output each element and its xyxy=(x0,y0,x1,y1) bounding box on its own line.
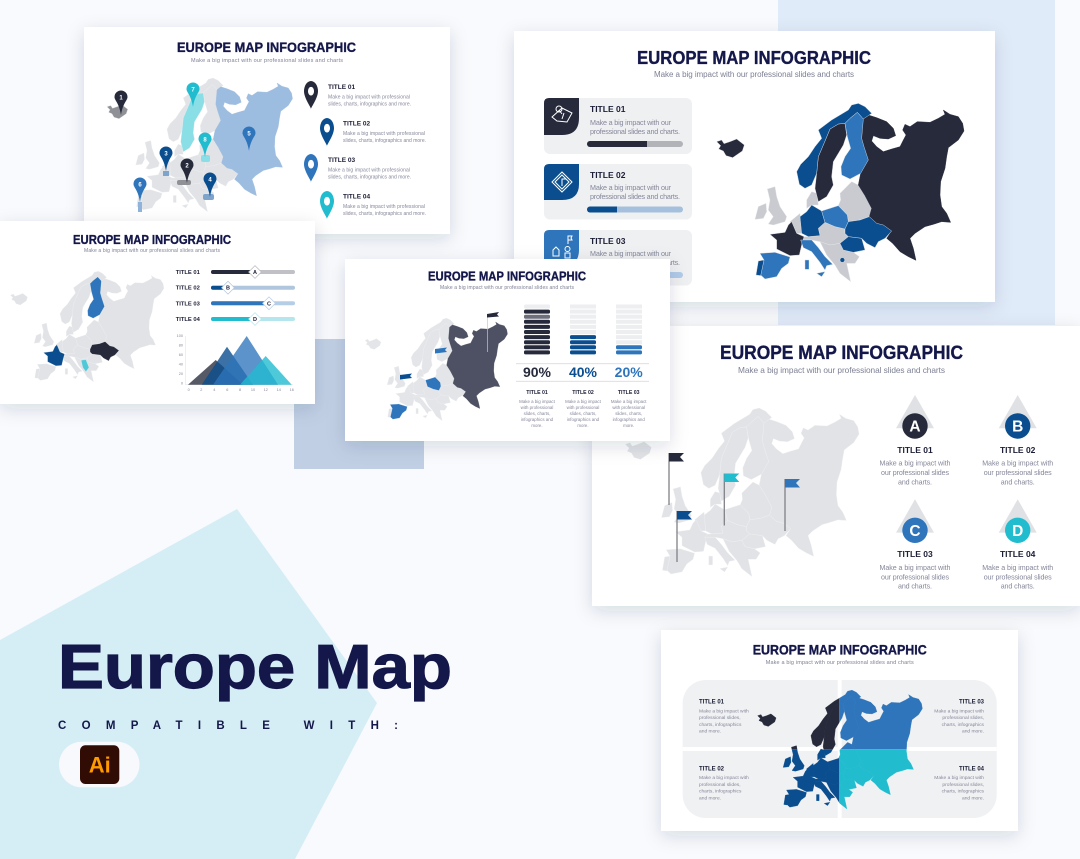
card 02: TITLE 02 xyxy=(590,170,626,180)
legend items: TITLE 04 xyxy=(343,194,370,200)
legend items: slides, charts, infographics and more. xyxy=(343,211,426,217)
panel 1 subheading: Make a big impact with our professional slides and charts xyxy=(191,58,343,64)
map pins 1 to 8: 1 xyxy=(119,96,123,102)
map pins 1 to 8: 4 xyxy=(208,178,212,184)
panel: pins slide xyxy=(84,27,450,234)
column 40% xyxy=(565,304,602,428)
slider rows: C xyxy=(267,301,271,307)
badge B: B xyxy=(1012,418,1023,436)
panel: stacked percent bars slide xyxy=(345,259,670,441)
mountain chart: 2 xyxy=(200,388,202,392)
badge A: A xyxy=(909,418,921,436)
panel 4 map xyxy=(365,318,508,421)
quadrant text 02: charts, infographics xyxy=(699,788,742,794)
main title: Europe Map xyxy=(58,633,452,702)
slider rows: TITLE 04 xyxy=(176,317,201,323)
badge: illustrator xyxy=(59,742,140,787)
badge: illustrator: Ai xyxy=(89,752,111,778)
mountain chart xyxy=(177,334,294,392)
quadrant text 02 xyxy=(699,766,749,802)
mountain chart: 0 xyxy=(181,382,183,386)
map pins 1 to 8: 5 xyxy=(247,132,251,138)
column 40%: TITLE 02 xyxy=(572,390,594,396)
map flags xyxy=(400,312,499,380)
map pins 1 to 8: 2 xyxy=(185,164,189,170)
column 40%: infographics and xyxy=(567,417,600,422)
card 01: Make a big impact with our xyxy=(590,118,672,127)
slider rows: TITLE 02 xyxy=(176,286,200,292)
panel 6 heading: EUROPE MAP INFOGRAPHIC xyxy=(753,642,927,658)
mountain chart: 10 xyxy=(251,388,255,392)
column 20% xyxy=(611,304,647,428)
column 90%: slides, charts, xyxy=(524,411,550,416)
badge C: Make a big impact with xyxy=(880,564,951,572)
slider rows: D xyxy=(253,317,257,323)
panel 6 subheading: Make a big impact with our professional slides and charts xyxy=(766,660,914,666)
legend items: slides, charts, infographics and more. xyxy=(328,102,411,108)
column 40%: with professional xyxy=(567,405,599,410)
badge B: our professional slides xyxy=(984,469,1052,477)
panel 5 map xyxy=(625,408,859,577)
legend items: Make a big impact with professional xyxy=(343,131,425,137)
panel 3 map xyxy=(10,271,164,382)
legend items: Make a big impact with professional xyxy=(328,168,410,174)
badge C xyxy=(880,499,951,591)
highlighted small countries on panel 1 map xyxy=(138,155,214,212)
badge A: TITLE 01 xyxy=(897,445,933,455)
quadrant text 04: Make a big impact with xyxy=(934,775,984,781)
map pins 1 to 8: 7 xyxy=(191,88,195,94)
map pins 1 to 8: 6 xyxy=(138,182,142,188)
column 90%: TITLE 01 xyxy=(526,390,548,396)
quadrant text 01 xyxy=(699,700,749,734)
slider rows: A xyxy=(253,270,257,276)
icon: folded map xyxy=(552,106,572,122)
slider rows xyxy=(176,266,295,325)
decorative blue square xyxy=(294,339,424,469)
card 02 xyxy=(544,164,692,220)
quadrant text 03 xyxy=(934,700,985,734)
legend items: TITLE 01 xyxy=(328,84,355,91)
column 20%: slides, charts, xyxy=(615,411,642,416)
mountain chart: 14 xyxy=(277,388,281,392)
badge D xyxy=(982,499,1053,591)
quadrant text 04: charts, infographics xyxy=(942,788,985,794)
panel 1 map xyxy=(107,78,292,212)
quadrant text 03: TITLE 03 xyxy=(959,700,985,706)
mountain chart: 100 xyxy=(177,334,183,338)
column 20%: infographics and xyxy=(613,417,645,422)
legend items: slides, charts, infographics and more. xyxy=(328,174,411,180)
badge B xyxy=(982,395,1053,486)
card 02: Make a big impact with our xyxy=(590,183,672,192)
map pins 1 to 8 xyxy=(114,82,256,202)
quadrant text 03: charts, infographics xyxy=(942,722,985,728)
legend items: TITLE 03 xyxy=(328,157,355,164)
badge C: and charts. xyxy=(898,583,932,591)
panel 5 heading: EUROPE MAP INFOGRAPHIC xyxy=(720,343,963,364)
panel: quadrant map slide xyxy=(661,630,1018,831)
column 90%: with professional xyxy=(521,405,553,410)
panel 3 subheading: Make a big impact with our professional slides and charts xyxy=(84,248,220,254)
mountain chart: 6 xyxy=(226,388,228,392)
slider rows: TITLE 01 xyxy=(176,270,201,276)
badge D: D xyxy=(1012,523,1023,540)
badge B: Make a big impact with xyxy=(982,460,1053,468)
quadrant background xyxy=(683,680,997,818)
badge D: and charts. xyxy=(1001,583,1035,591)
slider rows: TITLE 03 xyxy=(176,301,201,307)
column 90% xyxy=(519,304,556,428)
compatible with label: COMPATIBLE WITH: xyxy=(58,720,398,732)
badge D: TITLE 04 xyxy=(1000,549,1036,559)
card 03: TITLE 03 xyxy=(590,236,626,246)
badge D: Make a big impact with xyxy=(982,564,1053,572)
quadrant text 03: professional slides, xyxy=(942,715,984,721)
card 02: professional slides and charts. xyxy=(590,192,680,201)
panel 2 heading: EUROPE MAP INFOGRAPHIC xyxy=(637,47,871,68)
legend items: Make a big impact with professional xyxy=(328,94,410,100)
quadrant text 01: Make a big impact with xyxy=(699,708,749,714)
legend items: slides, charts, infographics and more. xyxy=(343,138,426,144)
quadrant text 04: professional slides, xyxy=(942,782,984,788)
map pins 1 to 8: 3 xyxy=(164,152,168,158)
badge A: and charts. xyxy=(898,478,932,486)
card 03: professional slides and charts. xyxy=(590,258,680,267)
column 40%: 40% xyxy=(569,364,598,380)
column 90%: infographics and xyxy=(521,417,554,422)
panel 2 subheading: Make a big impact with our professional slides and charts xyxy=(654,70,854,79)
mountain chart: 16 xyxy=(290,388,294,392)
quadrant text 02: professional slides, xyxy=(699,782,741,788)
badge B: TITLE 02 xyxy=(1000,445,1036,455)
panel 4 subheading: Make a big impact with our professional slides and charts xyxy=(440,285,574,291)
card 01: TITLE 01 xyxy=(590,104,626,114)
badge C: TITLE 03 xyxy=(897,549,933,559)
mountain chart: 60 xyxy=(179,353,183,357)
column 90%: 90% xyxy=(523,364,552,380)
badge A: our professional slides xyxy=(881,469,949,477)
quadrant text 04 xyxy=(934,766,985,802)
panel: slide with flags and letter badges xyxy=(592,326,1080,606)
panel 4 heading: EUROPE MAP INFOGRAPHIC xyxy=(428,268,587,284)
mountain chart: 8 xyxy=(239,388,241,392)
quadrant text 04: and more. xyxy=(962,796,984,802)
panel 5 subheading: Make a big impact with our professional slides and charts xyxy=(738,365,945,375)
quadrant text 01: and more. xyxy=(699,728,721,734)
column 20%: TITLE 03 xyxy=(618,390,640,396)
legend items xyxy=(304,81,426,219)
column 20%: 20% xyxy=(615,364,643,380)
mountain chart: 80 xyxy=(179,343,183,347)
panel 2 map xyxy=(717,103,964,282)
panel: sliders and mountain chart slide xyxy=(0,221,315,404)
badge C: our professional slides xyxy=(881,573,949,581)
quadrant text 01: professional slides, xyxy=(699,715,741,721)
column 40%: more. xyxy=(577,423,589,428)
quadrant text 01: TITLE 01 xyxy=(699,700,725,706)
quadrant text 03: Make a big impact with xyxy=(934,708,984,714)
badge D: our professional slides xyxy=(984,573,1052,581)
badge C: C xyxy=(909,523,921,540)
column 20%: more. xyxy=(623,423,634,428)
legend items: TITLE 02 xyxy=(343,120,370,128)
decorative light blue rectangle xyxy=(778,0,1055,325)
column 20%: Make a big impact xyxy=(611,399,647,404)
mountain chart: 4 xyxy=(213,388,215,392)
mountain chart: 12 xyxy=(264,388,268,392)
panel 1 heading: EUROPE MAP INFOGRAPHIC xyxy=(177,39,356,55)
quadrant text 02: and more. xyxy=(699,796,721,802)
mountain chart: 40 xyxy=(179,362,183,366)
icon: road sign xyxy=(552,172,572,192)
card 01 xyxy=(544,98,692,154)
quadrant text 03: and more. xyxy=(962,728,984,734)
badge B: and charts. xyxy=(1001,478,1035,486)
quadrant text 02: Make a big impact with xyxy=(699,775,749,781)
column 20%: with professional xyxy=(612,405,645,410)
icon: chess pieces and flag xyxy=(553,236,572,258)
quadrant text 02: TITLE 02 xyxy=(699,766,725,772)
panel: cards and progress bars slide xyxy=(514,31,995,302)
quadrant text 04: TITLE 04 xyxy=(959,766,985,772)
column 40%: slides, charts, xyxy=(570,411,596,416)
flags on map xyxy=(669,453,800,562)
card 01: professional slides and charts. xyxy=(590,127,680,136)
mountain chart: 0 xyxy=(188,388,190,392)
legend items: Make a big impact with professional xyxy=(343,204,425,210)
card 03: Make a big impact with our xyxy=(590,249,672,258)
panel 3 heading: EUROPE MAP INFOGRAPHIC xyxy=(73,232,232,247)
quadrant map xyxy=(758,690,922,809)
mountain chart: 20 xyxy=(179,372,183,376)
map pins 1 to 8: 8 xyxy=(203,138,207,144)
column 40%: Make a big impact xyxy=(565,399,602,404)
column 90%: Make a big impact xyxy=(519,399,556,404)
slider rows: B xyxy=(226,286,230,292)
card 03 xyxy=(544,230,692,286)
badge A xyxy=(880,395,951,486)
decorative pale teal hexagon xyxy=(0,509,377,859)
column 90%: more. xyxy=(531,423,543,428)
badge A: Make a big impact with xyxy=(880,460,951,468)
quadrant text 01: charts, infographics xyxy=(699,722,742,728)
